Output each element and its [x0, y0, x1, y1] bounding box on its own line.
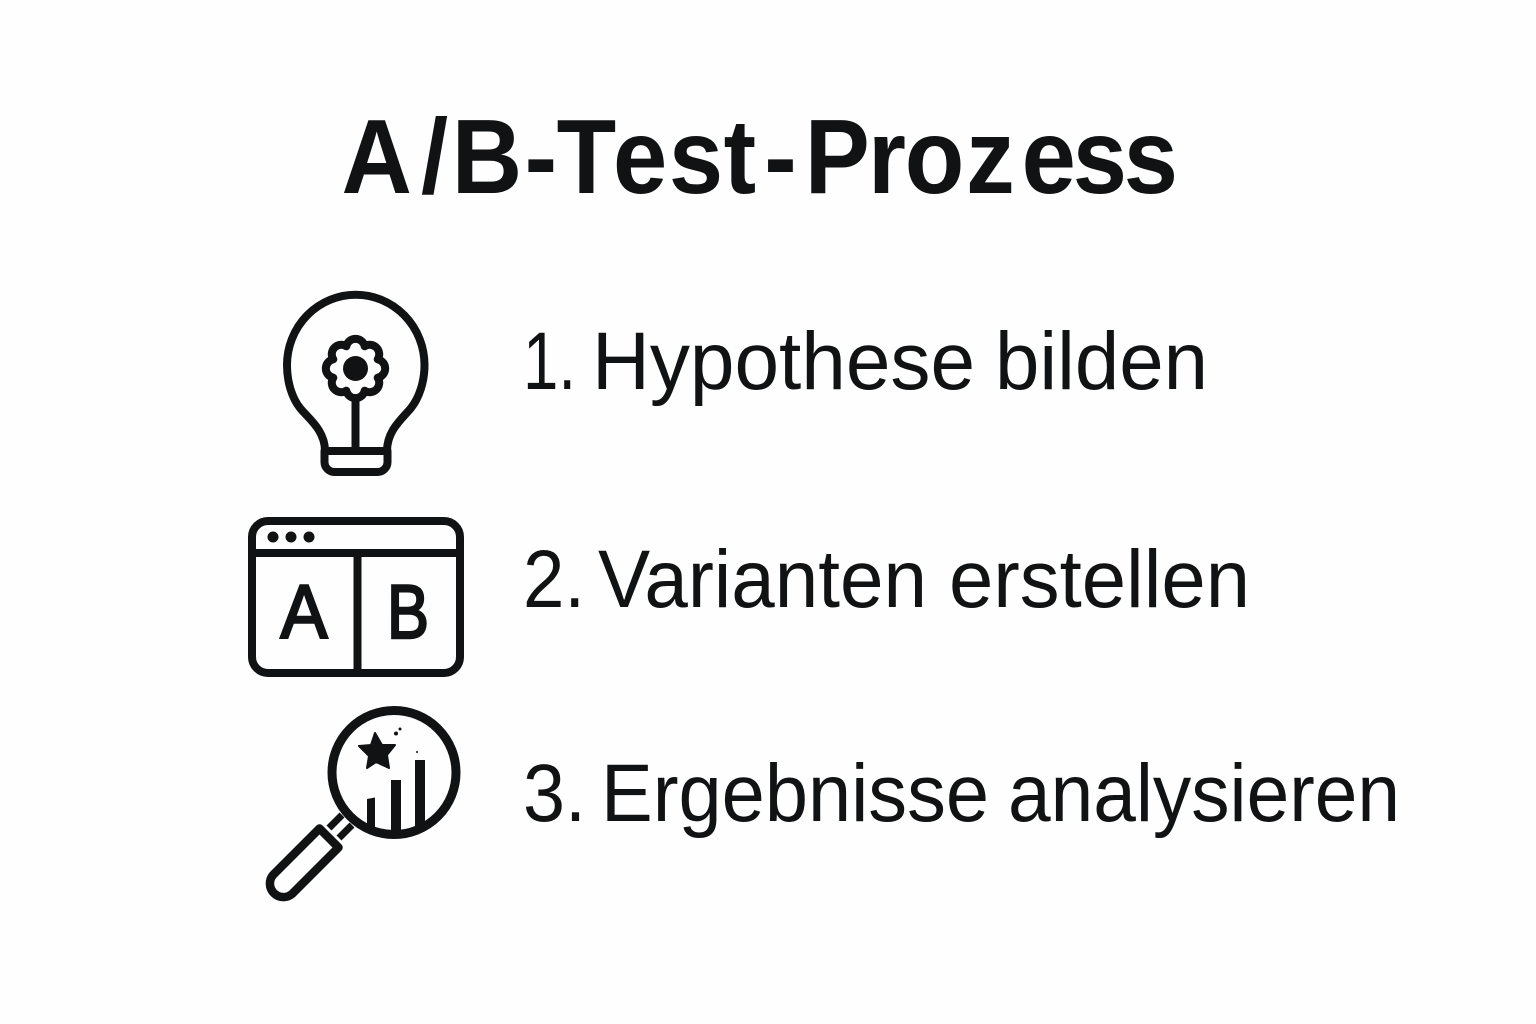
label: step 2: Varianten [598, 534, 927, 625]
label: step 1 [523, 316, 1208, 407]
icon: magnifier with star and bars [270, 710, 456, 897]
icon: browser window with A and B [252, 521, 460, 673]
label: step 1: bilden [995, 316, 1208, 407]
step 3: analysis [270, 710, 1400, 897]
label: step 2: erstellen [949, 534, 1250, 625]
icon: browser window with A and B: B [387, 570, 429, 655]
title: A/B-Test-Prozess [342, 97, 1178, 216]
label: step 3: Ergebnisse [601, 748, 989, 839]
label: step 3: analysieren [1008, 748, 1400, 839]
label: step 3: 3. [523, 748, 586, 839]
icon: browser window with A and B: A [280, 570, 328, 655]
label: step 3 [523, 748, 1400, 839]
label: step 2 [523, 534, 1250, 625]
step 1: hypothesis [287, 295, 1208, 472]
label: step 1: Hypothese [592, 316, 975, 407]
step 2: variants [252, 521, 1250, 673]
label: step 1: 1. [523, 316, 576, 407]
icon: light bulb with gear [287, 295, 424, 472]
label: step 2: 2. [523, 534, 585, 625]
